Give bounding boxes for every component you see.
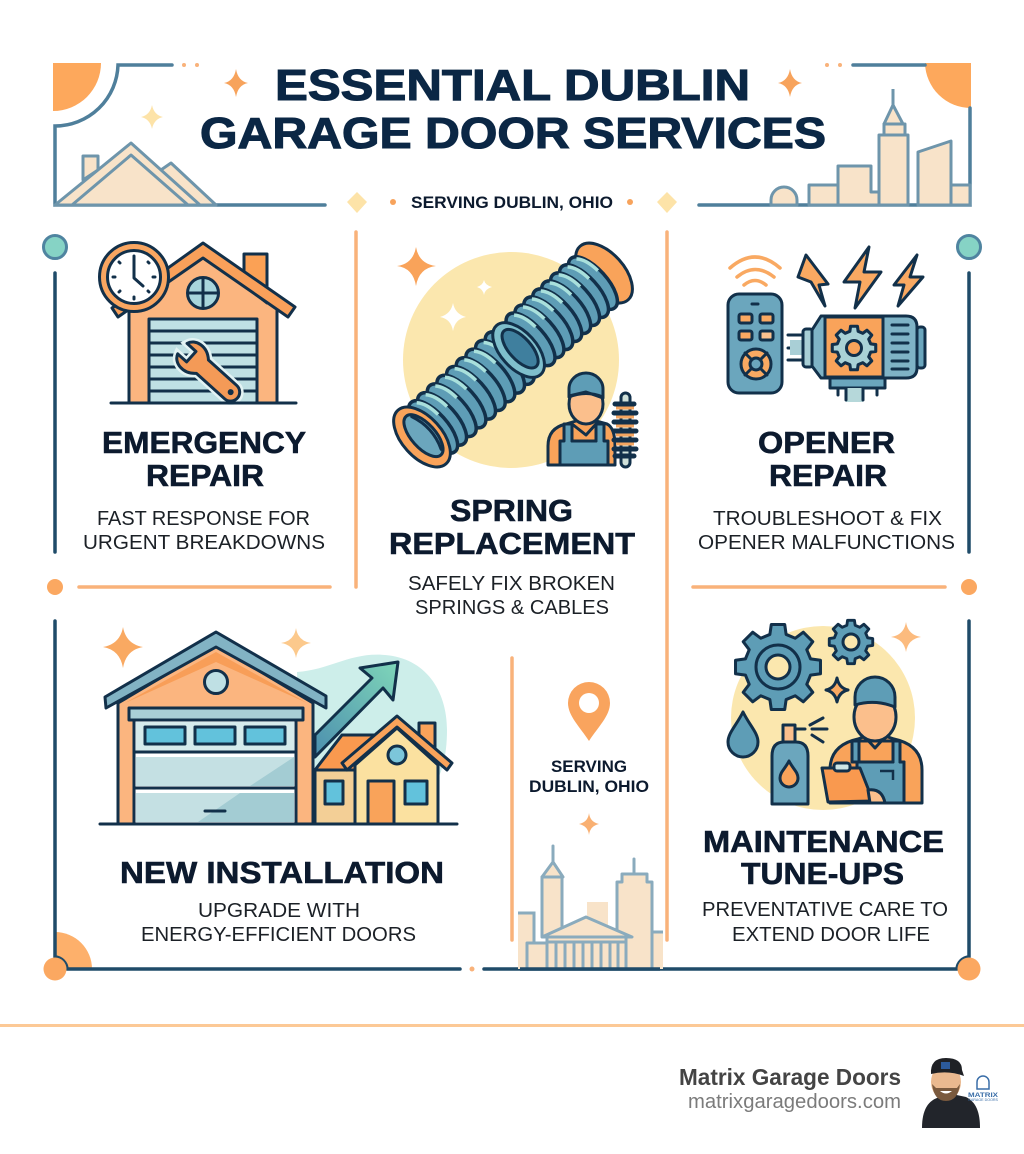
description: ENERGY-EFFICIENT DOORS <box>141 923 416 946</box>
heading <box>102 426 306 493</box>
heading: REPAIR <box>146 459 264 493</box>
sparkles <box>397 247 492 331</box>
header left corner and frame <box>53 63 325 205</box>
company name: Matrix Garage Doors <box>679 1064 901 1090</box>
website: matrixgaragedoors.com <box>688 1091 901 1113</box>
description: PREVENTATIVE CARE TO <box>702 898 948 921</box>
description: OPENER MALFUNCTIONS <box>698 531 955 554</box>
header right corner and frame <box>699 63 971 205</box>
heading <box>703 825 944 891</box>
description: UPGRADE WITH <box>198 899 360 922</box>
heading: SPRING <box>450 494 573 528</box>
description: TROUBLESHOOT & FIX <box>713 507 942 530</box>
mascot portrait <box>922 1058 980 1128</box>
city skyline illustration <box>771 89 970 205</box>
header banner <box>53 61 971 213</box>
icon: lightning bolts <box>798 247 923 308</box>
icon: wifi signal <box>730 257 780 285</box>
icon: torsion spring <box>383 233 643 477</box>
icon: opener motor <box>788 316 925 402</box>
panel: emergency repair <box>83 242 325 554</box>
icon: new garage <box>105 632 326 824</box>
footer divider <box>0 1024 1024 1027</box>
heading <box>389 494 635 561</box>
heading: TUNE-UPS <box>741 857 904 891</box>
header decorative dots <box>182 63 842 67</box>
title: ESSENTIAL DUBLIN <box>275 61 750 110</box>
icon backdrop circle <box>403 252 619 468</box>
icon: technician with small spring <box>548 373 636 467</box>
heading: REPLACEMENT <box>389 527 635 561</box>
icon: remote control <box>728 294 782 393</box>
heading: MAINTENANCE <box>703 825 944 859</box>
location strip: SERVING DUBLIN, OHIO <box>411 194 613 212</box>
icon: large gear <box>736 625 820 709</box>
heading: OPENER <box>758 426 895 460</box>
label: SERVING <box>551 758 627 776</box>
description <box>141 899 416 946</box>
description <box>702 898 948 946</box>
bottom-left quarter accent <box>55 932 92 969</box>
ground line <box>100 822 457 826</box>
frame nodes <box>44 236 980 980</box>
label: DUBLIN, OHIO <box>529 778 649 796</box>
description: FAST RESPONSE FOR <box>97 507 310 530</box>
heading: REPAIR <box>769 459 887 493</box>
description: SAFELY FIX BROKEN <box>408 572 615 595</box>
icon: map pin <box>568 682 610 741</box>
footer branding <box>679 1058 999 1128</box>
skyline illustration <box>518 846 663 969</box>
roofline illustration <box>55 143 216 205</box>
title: GARAGE DOOR SERVICES <box>200 109 826 158</box>
icon: house with clock and wrench <box>100 242 296 409</box>
icon: oil drop <box>728 712 758 757</box>
panel: serving Dublin <box>518 682 663 969</box>
icon backdrop circle <box>731 626 915 810</box>
heading <box>758 426 895 493</box>
panel: opener repair <box>698 247 955 554</box>
heading: EMERGENCY <box>102 426 306 460</box>
icon: house <box>315 716 452 824</box>
description: EXTEND DOOR LIFE <box>732 923 930 946</box>
description: URGENT BREAKDOWNS <box>83 531 325 554</box>
sparkle orange left <box>224 69 248 97</box>
icon: small gear <box>829 620 873 664</box>
teal backdrop blob <box>297 655 447 790</box>
heading: NEW INSTALLATION <box>120 856 444 890</box>
icon: growth arrow <box>315 662 398 757</box>
mini logo: MATRIX <box>968 1092 999 1099</box>
description <box>408 572 615 619</box>
sparkle orange right <box>778 69 802 97</box>
sparkle yellow left <box>141 105 163 129</box>
panel: spring replacement <box>383 233 643 619</box>
sparkles <box>103 627 311 668</box>
label <box>529 758 649 796</box>
panel: new installation <box>100 627 457 946</box>
description: SPRINGS & CABLES <box>415 596 609 619</box>
mini logo: GARAGE DOORS <box>968 1098 999 1102</box>
sparkle <box>579 813 599 835</box>
description <box>83 507 325 554</box>
mini logo <box>968 1076 999 1102</box>
icon: spray can <box>772 718 827 804</box>
description <box>698 507 955 554</box>
location strip <box>347 192 677 213</box>
panel: maintenance tune-ups <box>702 620 948 946</box>
title <box>200 61 826 158</box>
sparkles <box>826 622 921 702</box>
panel dividers and frame <box>55 232 969 969</box>
icon: technician with clipboard <box>822 677 922 803</box>
